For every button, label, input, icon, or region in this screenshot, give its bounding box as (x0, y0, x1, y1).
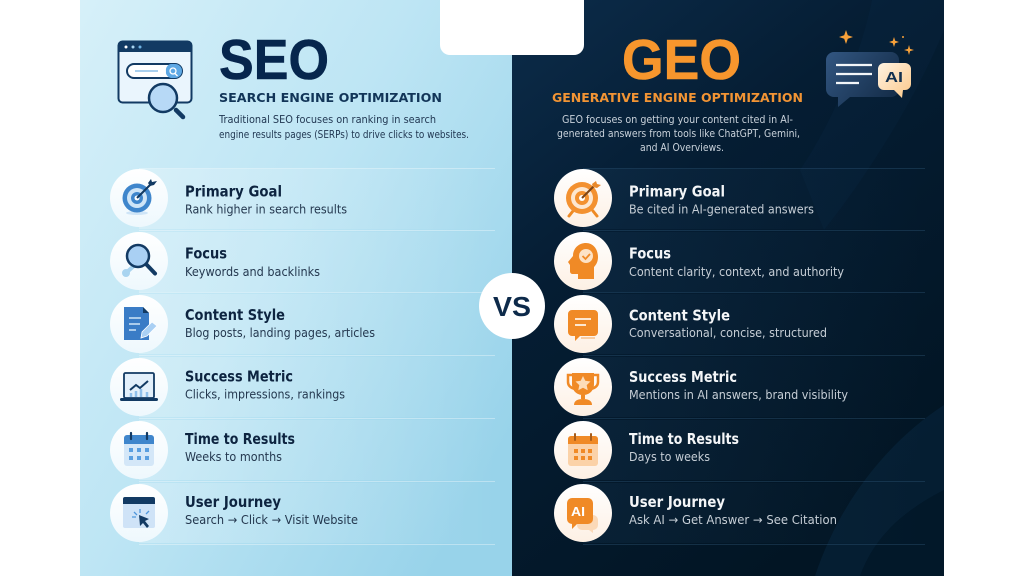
GEO row: Time to Results: Time to Results (629, 430, 739, 448)
SEO row: User Journey (110, 484, 358, 542)
GEO subtitle: GENERATIVE ENGINE OPTIMIZATION (552, 90, 803, 105)
GEO row: Content Style: Conversational, concise, structured (629, 326, 827, 340)
SEO row: Success Metric (110, 358, 345, 416)
SEO row: Focus (110, 232, 320, 290)
icon: orange target (566, 181, 601, 216)
GEO row: Primary Goal: Be cited in AI-generated answers (629, 202, 814, 216)
icon: magnifier and key (122, 245, 155, 277)
SEO row: Content Style: Blog posts, landing pages, articles (185, 326, 375, 340)
GEO row: Content Style (554, 295, 827, 353)
GEO row: User Journey: User Journey (629, 493, 725, 511)
SEO row bands (139, 169, 499, 543)
SEO row: Primary Goal: Primary Goal (185, 182, 282, 200)
SEO description (218, 113, 469, 141)
icon: laptop chart (122, 373, 156, 400)
GEO header icon: AI chat bubbles with sparkles: AI (885, 69, 903, 86)
GEO row: Primary Goal: Primary Goal (629, 182, 725, 200)
SEO row: User Journey: Search → Click → Visit Website (185, 513, 358, 527)
SEO description: engine results pages (SERPs) to drive clicks to websites. (219, 128, 469, 141)
SEO row: Content Style: Content Style (185, 306, 285, 324)
GEO description: and AI Overviews. (640, 141, 724, 154)
SEO header icon: browser with magnifier (118, 41, 192, 117)
icon: head with check (568, 243, 598, 279)
icon: target (122, 179, 157, 215)
GEO row: Time to Results (554, 421, 739, 479)
GEO row: Success Metric (554, 358, 848, 416)
VS badge: VS (493, 291, 531, 322)
SEO row: Primary Goal: Rank higher in search results (185, 202, 347, 216)
icon: calendar (124, 433, 154, 466)
GEO row: Success Metric: Success Metric (629, 368, 737, 386)
GEO row: Focus: Focus (629, 244, 671, 262)
GEO description: GEO focuses on getting your content cited in AI- (562, 113, 793, 126)
panel: GEO (512, 0, 944, 576)
SEO subtitle: SEARCH ENGINE OPTIMIZATION (219, 90, 442, 105)
GEO row bands (583, 169, 923, 543)
GEO description (557, 113, 800, 154)
SEO row: Time to Results: Time to Results (185, 430, 295, 448)
icon: orange calendar (568, 434, 598, 466)
SEO row: Success Metric: Success Metric (185, 368, 293, 386)
GEO description: generated answers from tools like ChatGPT, Gemini, (557, 127, 800, 140)
GEO header icon: AI chat bubbles with sparkles (826, 30, 914, 107)
SEO heading: SEO (219, 28, 329, 92)
icon: AI chat: AI (571, 504, 585, 519)
SEO row: Content Style (110, 295, 375, 353)
GEO row: Success Metric: Mentions in AI answers, brand visibility (629, 388, 848, 402)
GEO row: Time to Results: Days to weeks (629, 450, 710, 464)
VS badge (479, 273, 545, 339)
SEO row: User Journey: User Journey (185, 493, 281, 511)
GEO heading: GEO (622, 28, 741, 92)
icon: browser click (123, 497, 155, 528)
SEO row: Success Metric: Clicks, impressions, rankings (185, 388, 345, 402)
icon: speech bubble (568, 310, 598, 341)
SEO row: Primary Goal (110, 169, 347, 227)
icon: document and pen (124, 307, 157, 340)
SEO row: Focus: Focus (185, 244, 227, 262)
GEO row: Primary Goal (554, 169, 814, 227)
SEO row: Focus: Keywords and backlinks (185, 265, 320, 279)
row dividers (139, 168, 495, 544)
SEO row: Time to Results: Weeks to months (185, 450, 282, 464)
GEO row: User Journey: Ask AI → Get Answer → See Citation (629, 513, 837, 527)
SEO row: Time to Results (110, 421, 295, 479)
GEO row: User Journey (554, 484, 837, 542)
GEO row: Focus: Content clarity, context, and authority (629, 265, 844, 279)
row dividers (583, 168, 925, 544)
GEO row: Content Style: Content Style (629, 306, 730, 324)
panel: SEO (80, 0, 512, 576)
SEO description: Traditional SEO focuses on ranking in search (218, 113, 436, 126)
GEO row: Focus (554, 232, 844, 290)
GEO decorative curves (800, 0, 944, 576)
icon: trophy (568, 373, 598, 405)
white top tab (440, 0, 584, 55)
icon: AI chat (567, 498, 598, 533)
